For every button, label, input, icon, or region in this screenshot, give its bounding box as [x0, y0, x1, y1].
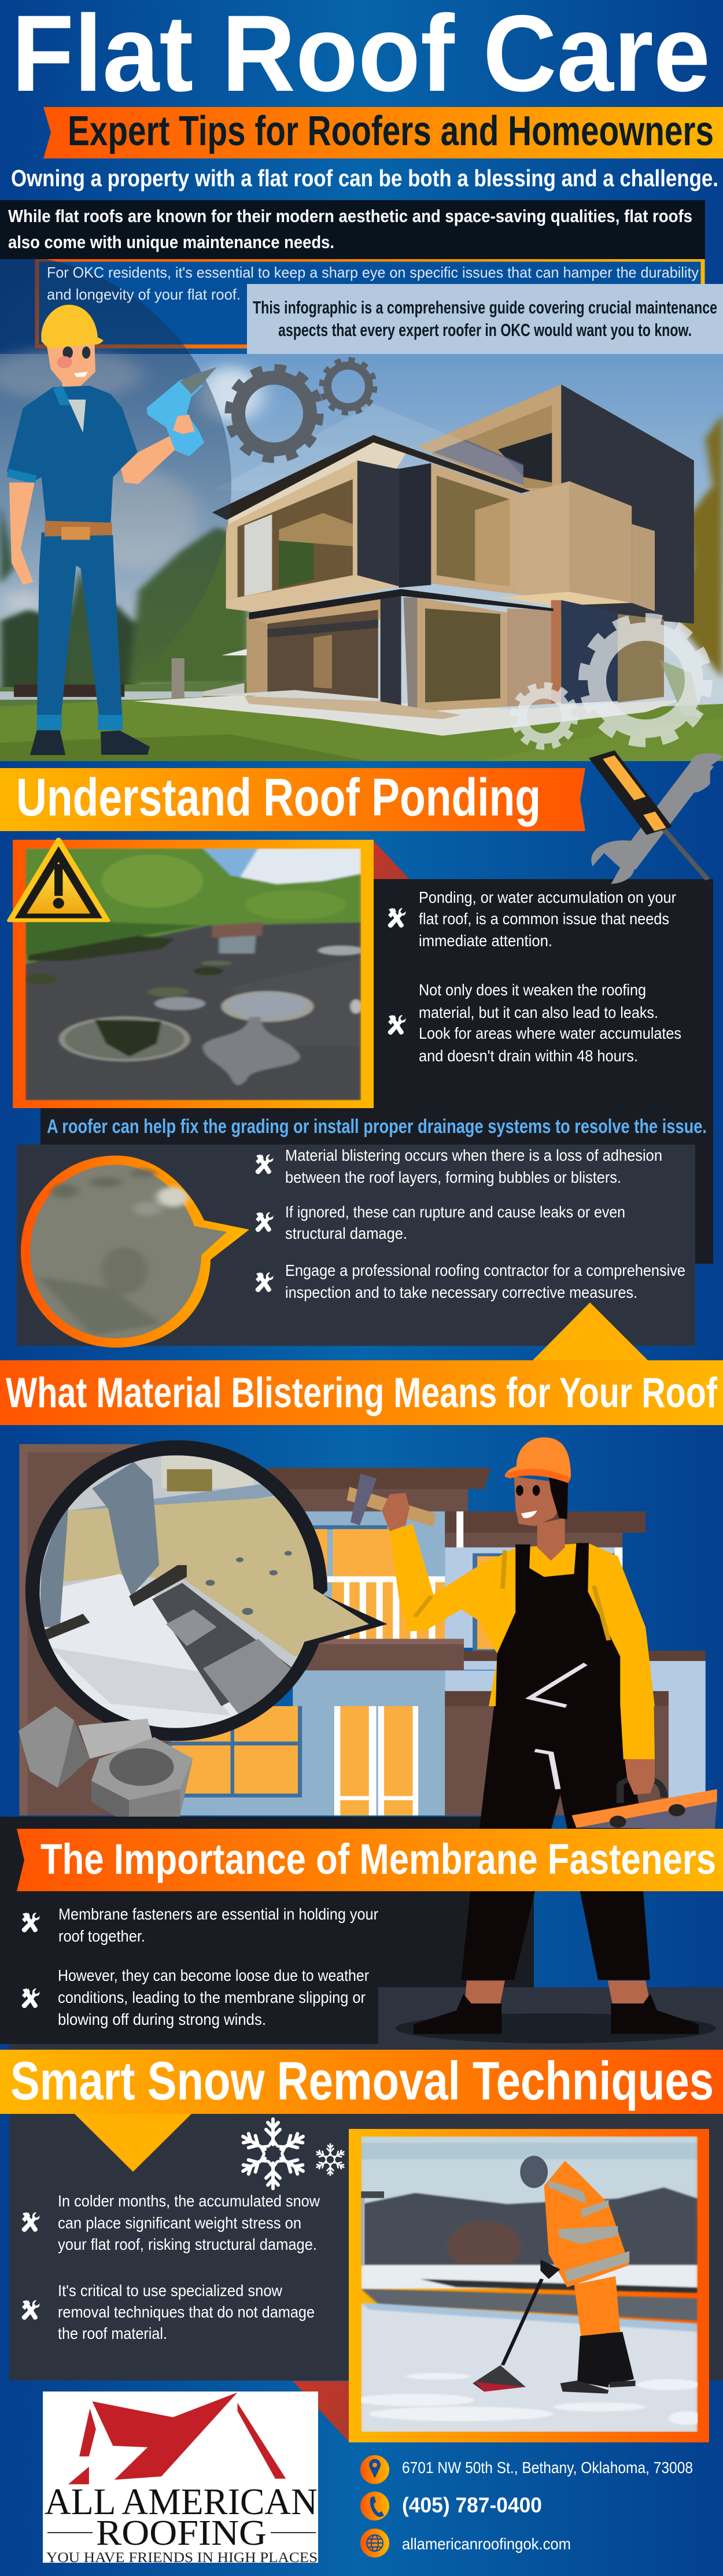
- contact: phone: [360, 2492, 542, 2520]
- icon: small snowflake: [315, 2144, 345, 2175]
- icon: large snowflake: [239, 2119, 307, 2189]
- text: ponding points: Look for areas where water accumulates: [419, 1024, 681, 1042]
- text: ponding points: and doesn't drain within 48 hours.: [419, 1047, 638, 1065]
- yellow pointer down: [75, 2114, 191, 2172]
- logo text: ROOFING: [96, 2514, 267, 2553]
- contact: phone: (405) 787-0400: [402, 2493, 542, 2517]
- logo roof mark: [68, 2393, 286, 2484]
- contact: website: allamericanroofingok.com: [402, 2535, 571, 2553]
- hard hat: [41, 305, 104, 348]
- hand: [173, 415, 194, 434]
- shirt: [7, 386, 138, 524]
- text: fasteners points: conditions, leading to the membrane slipping or: [58, 1988, 366, 2006]
- text: ponding points: [388, 888, 681, 1065]
- panel: blistering: between the roof layers, forming bubbles or blisters.: [285, 1168, 621, 1186]
- text: snow points: [22, 2192, 320, 2342]
- panel: blistering: [17, 1145, 695, 1346]
- icon: tools: [256, 1212, 274, 1232]
- sleeve cuffs: [7, 468, 37, 484]
- text: ponding points: Not only does it weaken the roofing: [419, 981, 646, 999]
- drill: [147, 378, 204, 456]
- text: fasteners points: [22, 1905, 378, 2028]
- logo text: [45, 2481, 318, 2566]
- collar: [53, 386, 72, 405]
- text: fasteners points: roof together.: [58, 1927, 145, 1945]
- icon: warning triangle: [9, 839, 108, 921]
- icon: white gears: [514, 618, 707, 747]
- text: OKC residents: [47, 264, 699, 303]
- panel: black intro box: [0, 200, 705, 259]
- text: ponding points: material, but it can also lead to leaks.: [419, 1003, 658, 1021]
- icon: dark gears: [228, 360, 375, 459]
- photo: ponding roof: [24, 848, 364, 1101]
- text: fasteners points: Membrane fasteners are essential in holding your: [58, 1905, 378, 1923]
- icon: tools: [388, 1015, 406, 1035]
- icon: tools: [256, 1154, 274, 1174]
- panel: light guide box: [247, 284, 723, 354]
- translucent circle behind worker: [0, 254, 231, 717]
- worker with drill: [7, 305, 217, 755]
- panel: blistering: structural damage.: [285, 1224, 407, 1242]
- worker with hammer: [346, 1437, 717, 2034]
- photo frame and red corner: [13, 840, 410, 1108]
- logo text: YOU HAVE FRIENDS IN HIGH PLACES: [46, 2550, 318, 2566]
- text: ponding points: flat roof, is a common issue that needs: [419, 910, 669, 928]
- blister photo bubble: [21, 1156, 249, 1348]
- drill bit: [180, 367, 217, 394]
- photo: snow removal: [355, 2136, 706, 2432]
- panel: hero photo: [0, 350, 723, 761]
- text: ponding points: Ponding, or water accumulation on your: [419, 888, 676, 906]
- text: snow points: removal techniques that do not damage: [58, 2303, 315, 2321]
- panel: blistering: Engage a professional roofing contractor for a comprehensive: [285, 1261, 685, 1279]
- text: snow points: It's critical to use specialized snow: [58, 2282, 283, 2300]
- icon: tools: [22, 1988, 40, 2008]
- text: OKC residents: For OKC residents, it's essential to keep a sharp eye on specific issues that can hamper the durability: [47, 264, 699, 281]
- illustration: house: [19, 1444, 706, 1815]
- belt: [45, 521, 112, 537]
- panel: black intro box: also come with unique maintenance needs.: [8, 232, 334, 252]
- text: snow points: can place significant weight stress on: [58, 2214, 301, 2232]
- face: [57, 346, 90, 377]
- icon: location pin: [360, 2455, 389, 2484]
- panel: logo: [43, 2392, 318, 2566]
- icon: globe: [360, 2529, 389, 2557]
- icon: tools: [256, 1272, 274, 1292]
- shadow: [396, 2013, 716, 2043]
- text: snow points: your flat roof, risking structural damage.: [58, 2235, 317, 2253]
- contact: website: [360, 2529, 571, 2557]
- panel: snow section: [9, 2111, 723, 2381]
- contact: address: [360, 2455, 693, 2484]
- panel: fasteners dark background: [0, 1817, 723, 2050]
- arm left: [9, 482, 35, 585]
- icon: screwdriver and wrench: [591, 753, 723, 884]
- icon: phone: [360, 2492, 389, 2520]
- text: fasteners points: blowing off during strong winds.: [58, 2010, 266, 2028]
- panel: blistering: Material blistering occurs when there is a loss of adhesion: [285, 1146, 662, 1164]
- text: fasteners points: However, they can become loose due to weather: [58, 1966, 369, 1984]
- text: snow points: In colder months, the accumulated snow: [58, 2192, 320, 2210]
- panel: blistering: inspection and to take necessary corrective measures.: [285, 1283, 637, 1301]
- trousers: [37, 532, 122, 718]
- heading: Understand Roof Ponding: Understand Roof Ponding: [16, 768, 541, 827]
- icon: bolt and nut: [19, 1706, 193, 1825]
- undershirt: [68, 400, 86, 433]
- red corner: [293, 2381, 349, 2442]
- panel: dark ponding panel: [40, 879, 713, 1264]
- text: ponding points: immediate attention.: [419, 932, 552, 950]
- text: OKC residents: and longevity of your flat roof.: [47, 286, 241, 303]
- icon: tools: [22, 2212, 40, 2232]
- text: snow points: the roof material.: [58, 2324, 167, 2342]
- icon: tools: [388, 908, 406, 928]
- cuffs: [37, 715, 123, 730]
- buckle: [61, 527, 90, 540]
- arm right: [121, 436, 185, 484]
- speech bubble photo: [25, 1440, 397, 1745]
- icon: tools: [22, 1913, 40, 1932]
- icon: tools: [22, 2300, 40, 2320]
- logo text: ALL AMERICAN: [45, 2481, 318, 2523]
- photo frame: snow: [349, 2129, 709, 2442]
- panel: blistering: If ignored, these can rupture and cause leaks or even: [285, 1203, 625, 1221]
- yellow pointer triangle: [533, 1302, 648, 1360]
- worker shoe right: [101, 730, 150, 755]
- shoes: [30, 730, 65, 755]
- orange framed box: [37, 260, 703, 346]
- neck and head: [46, 341, 95, 401]
